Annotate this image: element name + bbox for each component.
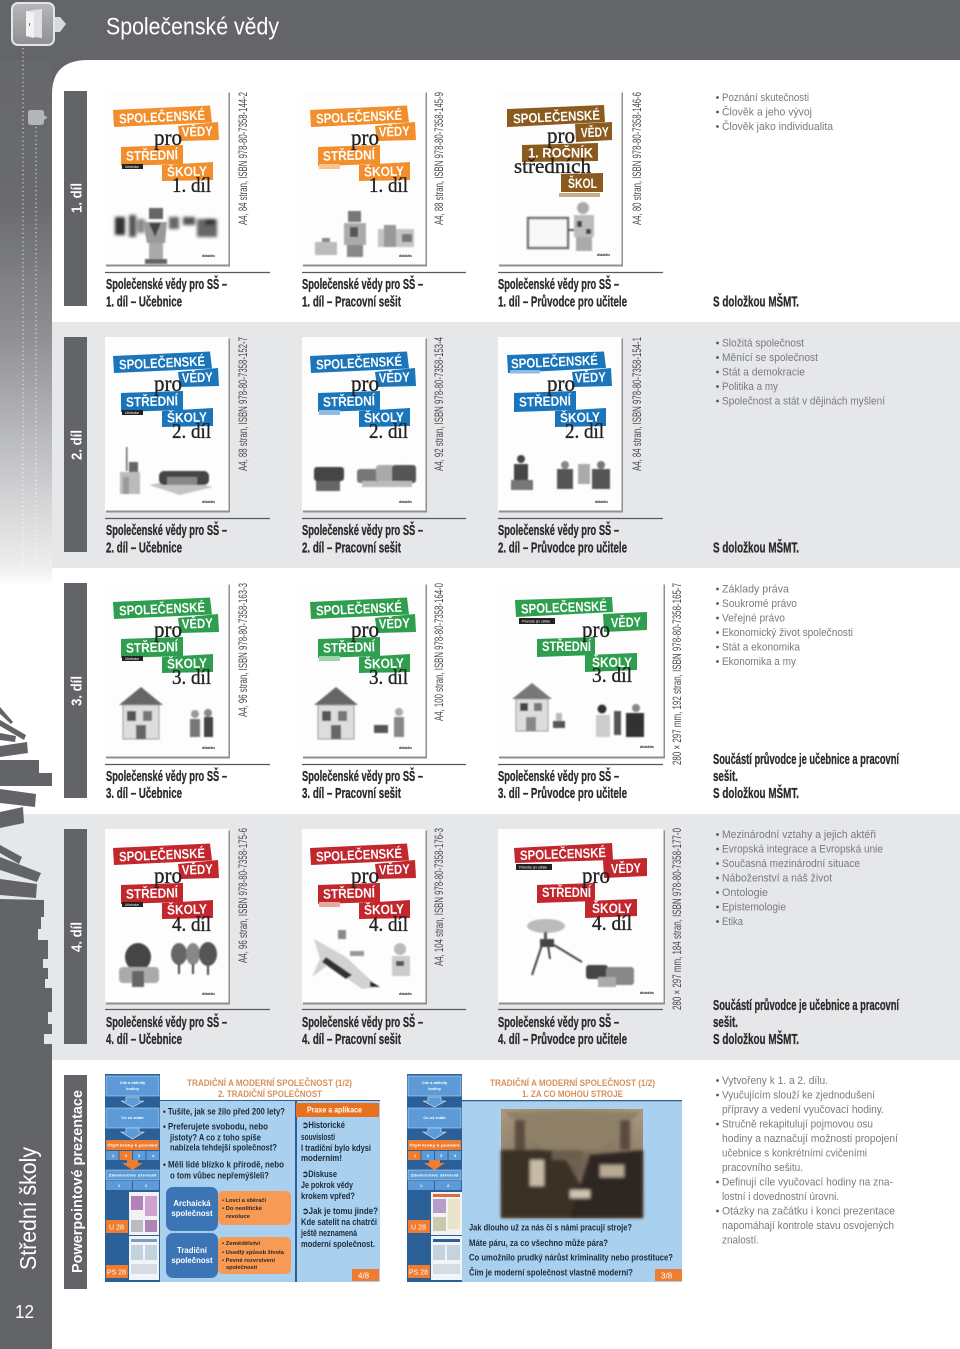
book cover: 4. díl průvodce pro učitele <box>498 829 665 1004</box>
book cover: 3. díl průvodce pro učitele: ŠKOLY <box>592 655 632 670</box>
slide navigation column: U 28 <box>109 1222 124 1232</box>
topic list: powerpoint presentations: pracovního sešitu. <box>722 1162 803 1174</box>
isbn labels: row 3: A4, 96 stran, ISBN 978-80-7358-163-3 <box>236 583 250 717</box>
slide photo: factory <box>501 1109 643 1218</box>
slide diagram: archaická společnost: • Do neolitické <box>222 1206 262 1212</box>
book cover: 3. díl učebnice: ŠKOLY <box>167 655 207 672</box>
isbn labels: row 4: A4, 96 stran, ISBN 978-80-7358-175-6 <box>236 828 250 963</box>
panel: row 4 background <box>0 814 960 1060</box>
slide navigation column: 2 <box>447 1183 450 1188</box>
slide diagram: tradiční společnost: • Zemědělství <box>222 1241 260 1247</box>
book titles: row 2: Společenské vědy pro SŠ – <box>302 521 423 539</box>
book cover: 4. díl pracovní sešit: SPOLEČENSKÉ <box>316 846 402 864</box>
isbn labels: row 2: A4, 92 stran, ISBN 978-80-7358-153-4 <box>432 337 446 471</box>
book cover: 3. díl učebnice: VĚDY <box>182 616 213 632</box>
tab: 3. díl <box>64 583 87 798</box>
note: row 1: S doložkou MŠMT. <box>713 292 799 310</box>
isbn labels: row 1 <box>236 92 644 225</box>
slide navigation column: 1 <box>118 1183 121 1188</box>
slide navigation column: 2 <box>125 1153 128 1158</box>
book cover: 2. díl průvodce pro učitele: STŘEDNÍ <box>519 393 572 410</box>
book cover: 3. díl pracovní sešit: STŘEDNÍ <box>323 639 376 656</box>
slide questions <box>160 1101 295 1282</box>
note: row 4 <box>713 998 900 1048</box>
book cover: 4. díl průvodce pro učitele: pro <box>582 863 610 888</box>
book cover: 4. díl pracovní sešit: STŘEDNÍ <box>323 885 376 902</box>
book cover: 1. díl průvodce pro učitele: VĚDY <box>581 124 609 140</box>
book titles: row 1: Společenské vědy pro SŠ – <box>106 275 227 293</box>
slide questions: nabízela tehdejší společnost? <box>170 1142 277 1152</box>
book titles: row 2: 2. díl – Pracovní sešit <box>302 540 401 556</box>
book cover: 4. díl učebnice: VĚDY <box>182 862 213 878</box>
book cover: 2. díl pracovní sešit: STŘEDNÍ <box>323 393 376 410</box>
slide navigation column: 2 <box>145 1183 148 1188</box>
book cover: 1. díl učebnice: 1. díl <box>172 173 211 197</box>
slide questions: Jak dlouho už za nás či s námi pracují stroje? <box>469 1222 632 1232</box>
book cover: 3. díl průvodce pro učitele: STŘEDNÍ <box>542 639 592 654</box>
tab: 4. díl <box>64 829 87 1044</box>
slide navigation column: Co už znáte <box>423 1115 446 1120</box>
book cover: 1. díl učebnice: pro <box>154 125 182 150</box>
topic list: row 1: Člověk jako individualita <box>722 120 833 133</box>
slide questions: o tom vůbec nepřemýšleli? <box>170 1170 269 1180</box>
isbn labels: row 1: A4, 88 stran, ISBN 978-80-7358-145-9 <box>432 92 446 225</box>
isbn labels: row 4: 280 × 297 mm, 184 stran, ISBN 978-80-7358-177-0 <box>670 828 684 1010</box>
slide navigation column: 2 <box>427 1153 430 1158</box>
book titles: row 3: 3. díl – Učebnice <box>106 786 182 802</box>
slide navigation column: 4 <box>152 1153 155 1158</box>
book titles: row 1: Společenské vědy pro SŠ – <box>302 275 423 293</box>
book cover: 3. díl průvodce pro učitele: pro <box>582 617 610 642</box>
book cover: 2. díl učebnice: VĚDY <box>182 370 213 386</box>
book cover: 1. díl průvodce pro učitele: středních <box>514 154 591 178</box>
book cover: 1. díl pracovní sešit: pro <box>351 125 379 150</box>
book titles: row 3: Společenské vědy pro SŠ – <box>106 767 227 785</box>
slide diagram: archaická společnost: • Lovci a sběrači <box>222 1198 266 1204</box>
book cover: 1. díl pracovní sešit: STŘEDNÍ <box>323 147 376 164</box>
isbn labels: row 3: A4, 100 stran, ISBN 978-80-7358-164-0 <box>432 583 446 721</box>
book cover: 2. díl průvodce pro učitele: pro <box>547 371 575 396</box>
book cover: 4. díl učebnice <box>105 829 230 1004</box>
slide side panel: praxe a aplikace: moderní společnost. <box>301 1239 375 1249</box>
topic list: row 4: Etika <box>722 916 743 928</box>
book titles: row 1: 1. díl – Učebnice <box>106 294 182 310</box>
slide side panel: praxe a aplikace: ➲Diskuse <box>302 1169 337 1179</box>
book cover: 1. díl průvodce pro učitele <box>498 91 623 266</box>
slide navigation column: hodiny <box>126 1086 140 1091</box>
book cover: 1. díl průvodce pro učitele: ŠKOL <box>568 176 597 191</box>
slide questions: jistoty? A co z toho spíše <box>169 1132 261 1142</box>
book titles: row 1: 1. díl – Pracovní sešit <box>302 294 401 310</box>
book titles: row 2: Společenské vědy pro SŠ – <box>106 521 227 539</box>
topic list: powerpoint presentations: Vytvořeny k 1. a 2. dílu. <box>722 1075 828 1087</box>
book titles: row 4 <box>106 1013 627 1048</box>
book cover: 4. díl učebnice: 4. díl <box>172 912 211 936</box>
slide heading: 2. TRADIČNÍ SPOLEČNOST <box>218 1088 322 1099</box>
slide navigation column: Cíle a aktivity <box>120 1080 146 1085</box>
slide heading <box>160 1074 380 1102</box>
icon: small marker tile <box>28 110 48 125</box>
book cover: 1. díl učebnice: Učebnice <box>125 165 139 169</box>
slide diagram: tradiční společnost: • Usedlý způsob života <box>222 1249 285 1256</box>
tab: 3. díl: 3. díl <box>68 676 86 706</box>
book cover: 1. díl pracovní sešit: SPOLEČENSKÉ <box>316 108 402 126</box>
isbn labels: row 4 <box>236 828 684 1010</box>
book cover: 3. díl průvodce pro učitele: SPOLEČENSKÉ <box>521 598 607 616</box>
topic list: row 3: Soukromé právo <box>722 598 797 610</box>
tab: 2. díl <box>64 337 87 552</box>
book cover: 4. díl pracovní sešit: VĚDY <box>379 862 410 878</box>
topic list: row 2: Politika a my <box>722 381 779 393</box>
topic list: row 4 <box>716 829 883 928</box>
book cover: 1. díl učebnice: ŠKOLY <box>167 163 207 180</box>
book titles: row 3: Společenské vědy pro SŠ – <box>498 767 619 785</box>
tab: Powerpointové prezentace: Powerpointové prezentace <box>69 1090 86 1273</box>
note: row 2: S doložkou MŠMT. <box>713 538 799 556</box>
topic list: powerpoint presentations: Definují cíle vyučovací hodiny na zna- <box>722 1176 893 1188</box>
book cover: 1. díl učebnice: STŘEDNÍ <box>126 147 179 164</box>
book cover: 3. díl učebnice: Učebnice <box>125 657 139 661</box>
slide questions <box>469 1222 673 1278</box>
topic list: powerpoint presentations: učebnice s konkrétními cvičeními <box>722 1148 867 1160</box>
book cover: 1. díl pracovní sešit: VĚDY <box>379 124 410 140</box>
slide heading: 1. ZA CO MOHOU STROJE <box>522 1089 623 1099</box>
book cover: 2. díl učebnice: ŠKOLY <box>167 409 207 426</box>
topic list: row 2: Složitá společnost <box>722 338 804 350</box>
book cover: 4. díl učebnice: Učebnice <box>125 903 139 907</box>
book cover: 3. díl průvodce pro učitele: Průvodce pro učitele <box>522 620 550 624</box>
book cover: 4. díl učebnice: didaktis <box>202 992 215 996</box>
book cover: 1. díl pracovní sešit: 1. díl <box>369 173 408 197</box>
slide navigation column <box>105 1074 160 1282</box>
book cover: 2. díl učebnice: SPOLEČENSKÉ <box>119 354 205 372</box>
book cover: 2. díl učebnice: 2. díl <box>172 419 211 443</box>
book cover: 4. díl učebnice: STŘEDNÍ <box>126 885 179 902</box>
book cover: 4. díl pracovní sešit: 4. díl <box>369 912 408 936</box>
book cover: 4. díl pracovní sešit: pro <box>351 863 379 888</box>
book titles: row 4: Společenské vědy pro SŠ – <box>302 1013 423 1031</box>
slide navigation column: 1 <box>414 1153 417 1158</box>
book cover: 2. díl pracovní sešit: didaktis <box>399 500 412 504</box>
left strip background <box>0 0 52 1349</box>
slide diagram: tradiční společnost: Tradiční <box>177 1246 208 1255</box>
slide diagram: archaická společnost: Archaická <box>173 1199 211 1208</box>
panel: row 2 background <box>52 322 960 568</box>
book titles: row 3: Společenské vědy pro SŠ – <box>302 767 423 785</box>
slide questions: • Tušíte, jak se žilo před 200 lety? <box>163 1106 285 1116</box>
book cover: 2. díl pracovní sešit: pro <box>351 371 379 396</box>
book cover: 3. díl učebnice: 3. díl <box>172 665 211 689</box>
topic list: powerpoint presentations: hodiny a naznačují možnosti propojení <box>722 1133 898 1145</box>
isbn labels: row 4: A4, 104 stran, ISBN 978-80-7358-176-3 <box>432 828 446 966</box>
slide diagram: tradiční společnost: • Pevné rozvrstvení <box>222 1258 275 1264</box>
topic list: row 4: Evropská integrace a Evropská unie <box>722 844 883 856</box>
book cover: 2. díl učebnice <box>105 337 230 512</box>
book cover: 1. díl učebnice: didaktis <box>202 254 215 258</box>
slide diagram: tradiční společnost <box>166 1233 291 1278</box>
book cover: 2. díl pracovní sešit <box>302 337 427 512</box>
book titles: row 2: 2. díl – Učebnice <box>106 540 182 556</box>
book cover: 3. díl průvodce pro učitele: didaktis <box>640 745 654 749</box>
slide body <box>462 1102 682 1282</box>
slide page number: 3/8 <box>661 1272 673 1280</box>
book titles: row 4: Společenské vědy pro SŠ – <box>106 1013 227 1031</box>
isbn labels: row 2 <box>236 337 644 471</box>
slide side panel: praxe a aplikace: Je pokrok vědy <box>301 1180 353 1190</box>
slide navigation column: 1 <box>420 1183 423 1188</box>
topic list: row 2 <box>716 338 885 408</box>
book cover: 2. díl učebnice: STŘEDNÍ <box>126 393 179 410</box>
slide questions: • Preferujete svobodu, nebo <box>163 1122 269 1132</box>
book cover: 1. díl průvodce pro učitele: 1. ROČNÍK <box>528 146 593 160</box>
book cover: 2. díl pracovní sešit: 2. díl <box>369 419 408 443</box>
silhouette: stacked blocks skyline <box>0 707 52 1349</box>
book cover: 1. díl pracovní sešit: ŠKOLY <box>364 163 404 180</box>
book cover: 4. díl průvodce pro učitele: STŘEDNÍ <box>542 885 592 900</box>
slide navigation column: 3 <box>138 1153 141 1158</box>
note: row 3: S doložkou MŠMT. <box>713 784 799 802</box>
book cover: 2. díl pracovní sešit: VĚDY <box>379 370 410 386</box>
book cover: 3. díl učebnice: STŘEDNÍ <box>126 639 179 656</box>
slide navigation column: Čtyři kroky k poznání <box>108 1142 159 1148</box>
book cover: 2. díl průvodce pro učitele: 2. díl <box>565 419 604 443</box>
topic list: row 4: Náboženství a náš život <box>722 872 832 884</box>
slide diagram: archaická společnost: společnost <box>171 1209 213 1218</box>
book cover: 2. díl průvodce pro učitele: didaktis <box>595 500 608 504</box>
book cover: 2. díl průvodce pro učitele: VĚDY <box>575 370 606 386</box>
slide navigation column: PS 28 <box>107 1268 126 1276</box>
slide navigation column: Cíle a aktivity <box>422 1080 448 1085</box>
topic list: powerpoint presentations: přípravy a vedení vyučovací hodiny. <box>722 1104 884 1116</box>
topic list: row 4: Ontologie <box>722 887 768 899</box>
book cover: 3. díl průvodce pro učitele: 3. díl <box>592 663 632 687</box>
slide heading: TRADIČNÍ A MODERNÍ SPOLEČNOST (1/2) <box>490 1077 655 1088</box>
slide questions: Máte páru, za co všechno může pára? <box>469 1238 608 1248</box>
topic list: powerpoint presentations: lostní i dovednostní úrovni. <box>722 1191 839 1203</box>
isbn labels: row 1: A4, 84 stran, ISBN 978-80-7358-144-2 <box>236 92 250 225</box>
book titles: row 3: 3. díl – Průvodce pro učitele <box>498 786 627 802</box>
book cover: 2. díl pracovní sešit: SPOLEČENSKÉ <box>316 354 402 372</box>
tab: 2. díl: 2. díl <box>68 430 86 460</box>
topic list: row 1: Poznání skutečnosti <box>722 92 809 104</box>
slide side panel: praxe a aplikace <box>295 1101 380 1282</box>
topic list: powerpoint presentations <box>716 1075 898 1246</box>
book cover: 2. díl pracovní sešit: ŠKOLY <box>364 409 404 426</box>
book cover: 3. díl průvodce pro učitele <box>498 583 665 758</box>
book cover: 2. díl průvodce pro učitele <box>498 337 623 512</box>
topic list: row 3: Ekonomika a my <box>722 656 797 668</box>
header band <box>0 0 960 100</box>
book cover: 4. díl průvodce pro učitele: ŠKOLY <box>592 901 632 916</box>
tab: 4. díl: 4. díl <box>68 922 86 952</box>
slide navigation column: 4 <box>454 1153 457 1158</box>
topic list: powerpoint presentations: Otázky na začátku i konci prezentace <box>722 1206 895 1218</box>
note: row 3: sešit. <box>713 769 738 785</box>
slide side panel: praxe a aplikace: Kde satelit na chatrči <box>301 1217 377 1227</box>
slide heading <box>462 1074 682 1102</box>
slide diagram: archaická společnost <box>166 1187 291 1231</box>
slide side panel: praxe a aplikace: souvislosti <box>301 1132 335 1142</box>
book titles: row 3: 3. díl – Pracovní sešit <box>302 786 401 802</box>
book cover: 4. díl průvodce pro učitele: Průvodce pro učitele <box>519 866 547 870</box>
slide: tradiční společnost 4/8 <box>105 1074 380 1282</box>
book cover: 3. díl učebnice: SPOLEČENSKÉ <box>119 600 205 618</box>
book cover: 4. díl pracovní sešit: didaktis <box>399 992 412 996</box>
slide side panel: praxe a aplikace: ➲Jak je tomu jinde? <box>302 1206 378 1216</box>
book cover: 1. díl učebnice: VĚDY <box>182 124 213 140</box>
side label: Střední školy: Střední školy <box>15 1147 41 1270</box>
book cover: 3. díl učebnice: didaktis <box>202 746 215 750</box>
isbn labels: row 2: A4, 84 stran, ISBN 978-80-7358-154-1 <box>630 337 644 471</box>
book cover: 2. díl průvodce pro učitele: SPOLEČENSKÉ <box>511 353 598 371</box>
book titles: row 2: 2. díl – Průvodce pro učitele <box>498 540 627 556</box>
book cover: 3. díl pracovní sešit: 3. díl <box>369 665 408 689</box>
book cover: 1. díl průvodce pro učitele: didaktis <box>597 253 610 257</box>
isbn labels: row 3: 280 × 297 mm, 192 stran, ISBN 978-80-7358-165-7 <box>670 583 684 765</box>
dotted guide lines <box>23 48 36 570</box>
topic list: powerpoint presentations: Stručně rekapitulují pojmovou osu <box>722 1118 873 1130</box>
book cover: 3. díl pracovní sešit: SPOLEČENSKÉ <box>316 600 402 618</box>
book titles: row 4: 4. díl – Průvodce pro učitele <box>498 1032 627 1048</box>
page number: 12 <box>15 1302 34 1322</box>
book cover: 4. díl průvodce pro učitele: didaktis <box>640 991 654 995</box>
book titles: row 4: 4. díl – Učebnice <box>106 1032 182 1048</box>
topic list: powerpoint presentations: napomáhají kontrole stavu osvojených <box>722 1220 894 1232</box>
topic list: row 3: Veřejné právo <box>722 612 785 624</box>
book titles: row 2 <box>106 521 627 556</box>
book cover: 1. díl průvodce pro učitele: SPOLEČENSKÉ <box>513 108 600 126</box>
slide heading: TRADIČNÍ A MODERNÍ SPOLEČNOST (1/2) <box>187 1077 352 1088</box>
book cover: 3. díl učebnice <box>105 583 230 758</box>
slide side panel: praxe a aplikace: Praxe a aplikace <box>307 1106 362 1114</box>
slide navigation column: Čtyři kroky k poznání <box>410 1142 461 1148</box>
book cover: 3. díl učebnice: pro <box>154 617 182 642</box>
topic list: row 3: Stát a ekonomika <box>722 642 800 654</box>
book cover: 2. díl učebnice: Učebnice <box>125 411 139 415</box>
tab: 1. díl: 1. díl <box>68 183 86 213</box>
tab: Powerpointové prezentace <box>64 1075 87 1289</box>
topic list: powerpoint presentations: Vyučujícím slouží ke zjednodušení <box>722 1090 875 1102</box>
book titles: row 1: Společenské vědy pro SŠ – <box>498 275 619 293</box>
book cover: 4. díl pracovní sešit: ŠKOLY <box>364 901 404 918</box>
isbn labels: row 1: A4, 80 stran, ISBN 978-80-7358-146-6 <box>630 92 644 225</box>
book cover: 3. díl průvodce pro učitele: VĚDY <box>611 614 641 630</box>
slide side panel: praxe a aplikace: krokem vpřed? <box>301 1191 355 1201</box>
topic list: row 3: Základy práva <box>722 584 789 596</box>
book cover: 2. díl učebnice: pro <box>154 371 182 396</box>
book cover: 4. díl průvodce pro učitele: VĚDY <box>611 860 641 876</box>
slide page number <box>655 1269 682 1281</box>
title: Společenské vědy <box>106 14 279 40</box>
book cover: 4. díl průvodce pro učitele: 4. díl <box>592 911 632 935</box>
book cover: 1. díl učebnice: SPOLEČENSKÉ <box>119 108 205 126</box>
isbn labels: row 3 <box>236 583 684 765</box>
slide navigation column <box>407 1074 462 1282</box>
slide diagram: tradiční společnost: společnosti <box>226 1265 257 1271</box>
book cover: 3. díl pracovní sešit: VĚDY <box>379 616 410 632</box>
topic list: row 4: Epistemologie <box>722 902 786 914</box>
slide questions: Čím je moderní společnost vlastně moderní? <box>469 1266 633 1278</box>
book cover: 4. díl pracovní sešit <box>302 829 427 1004</box>
slide: za co mohou stroje 3/8 <box>407 1074 682 1282</box>
book titles: row 1 <box>106 275 627 310</box>
book titles: row 3 <box>106 767 627 802</box>
slide navigation column: hodiny <box>428 1086 442 1091</box>
slide navigation column: 1 <box>112 1153 115 1158</box>
book titles: row 1: 1. díl – Průvodce pro učitele <box>498 294 627 310</box>
slide side panel: praxe a aplikace: ještě neznamená <box>300 1228 357 1238</box>
slide side panel: praxe a aplikace: 4/8 <box>358 1272 370 1280</box>
slide diagram: tradiční společnost: společnost <box>171 1256 213 1265</box>
note: row 3 <box>713 752 900 802</box>
book cover: 3. díl pracovní sešit: didaktis <box>399 746 412 750</box>
book cover: 2. díl průvodce pro učitele: ŠKOLY <box>560 409 600 426</box>
isbn labels: row 2: A4, 88 stran, ISBN 978-80-7358-152-7 <box>236 337 250 471</box>
book cover: 3. díl pracovní sešit: pro <box>351 617 379 642</box>
book cover: 2. díl učebnice: didaktis <box>202 500 215 504</box>
book cover: 4. díl učebnice: pro <box>154 863 182 888</box>
note: row 4: S doložkou MŠMT. <box>713 1030 799 1048</box>
book cover: 4. díl průvodce pro učitele: SPOLEČENSKÉ <box>520 845 606 863</box>
book cover: 1. díl průvodce pro učitele: pro <box>547 123 575 148</box>
topic list: row 4: Současná mezinárodní situace <box>722 858 860 870</box>
topic list: row 4: Mezinárodní vztahy a jejich aktéři <box>722 829 876 841</box>
icon: door tile with arrow <box>12 3 66 45</box>
slide navigation column: Závěrečné shrnutí <box>108 1172 158 1178</box>
slide questions: • Měli lidé blízko k přírodě, nebo <box>163 1160 285 1170</box>
book cover: 4. díl učebnice: SPOLEČENSKÉ <box>119 846 205 864</box>
slide navigation column: 3 <box>440 1153 443 1158</box>
tab: 1. díl <box>64 91 87 306</box>
topic list: powerpoint presentations: znalostí. <box>722 1234 759 1246</box>
slide navigation column: Závěrečné shrnutí <box>410 1172 460 1178</box>
slide navigation column: U 28 <box>411 1222 426 1232</box>
topic list: row 2: Stát a demokracie <box>722 366 805 378</box>
book cover: 3. díl pracovní sešit: ŠKOLY <box>364 655 404 672</box>
book titles: row 2: Společenské vědy pro SŠ – <box>498 521 619 539</box>
topic list: row 1 <box>716 92 833 133</box>
topic list: row 2: Společnost a stát v dějinách myšlení <box>722 396 885 408</box>
slide diagram: archaická společnost: revoluce <box>226 1214 250 1220</box>
topic list: row 1: Člověk a jeho vývoj <box>722 106 812 118</box>
slide questions: Co umožnilo prudký nárůst kriminality nebo prostituce? <box>469 1252 673 1262</box>
book titles: row 4: Společenské vědy pro SŠ – <box>498 1013 619 1031</box>
topic list: row 3 <box>716 584 853 668</box>
slide navigation column: Co už znáte <box>121 1115 144 1120</box>
book cover: 3. díl pracovní sešit <box>302 583 427 758</box>
note: row 4: sešit. <box>713 1015 738 1031</box>
book cover: 1. díl pracovní sešit <box>302 91 427 266</box>
book titles: row 4: 4. díl – Pracovní sešit <box>302 1032 401 1048</box>
topic list: row 2: Měnící se společnost <box>722 352 818 364</box>
book cover: 1. díl učebnice <box>105 91 230 266</box>
book cover: 1. díl pracovní sešit: didaktis <box>399 254 412 258</box>
slide side panel: praxe a aplikace: I tradiční bylo kdysi <box>301 1143 371 1153</box>
slide navigation column: PS 28 <box>409 1268 428 1276</box>
book cover: 4. díl učebnice: ŠKOLY <box>167 901 207 918</box>
slide side panel: praxe a aplikace: moderním! <box>301 1153 342 1163</box>
slide side panel: praxe a aplikace: ➲Historické <box>302 1120 345 1130</box>
topic list: row 3: Ekonomický život společnosti <box>722 627 853 639</box>
